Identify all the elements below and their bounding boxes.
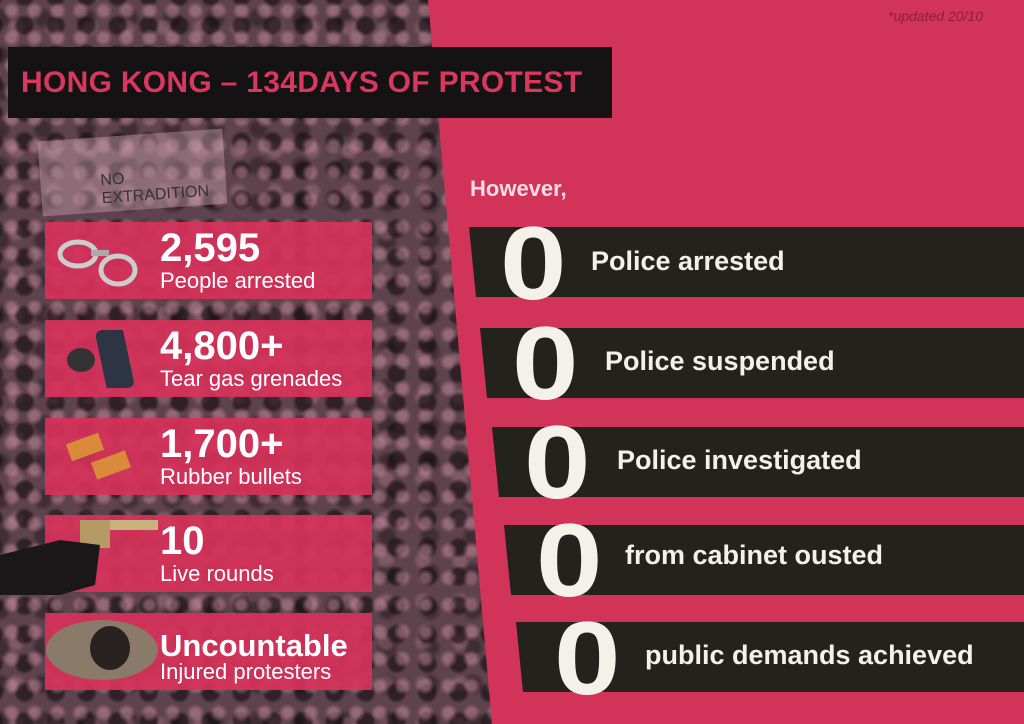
banner <box>38 129 227 216</box>
text: public demands achieved <box>645 640 974 670</box>
text: Police investigated <box>617 445 862 475</box>
text: 0 <box>554 601 621 717</box>
text: Police suspended <box>605 346 835 376</box>
card: live rounds: 10 <box>160 519 204 563</box>
icon: gun in gloved hand <box>0 520 158 595</box>
text: 0 <box>500 206 567 322</box>
card: arrested <box>45 222 372 299</box>
stat: police arrested <box>500 206 785 322</box>
card: tear gas <box>45 320 372 397</box>
card: live rounds <box>45 515 372 592</box>
background: pink panel <box>428 0 1024 724</box>
stat: cabinet ousted <box>536 503 883 619</box>
heading: However: However, <box>470 176 567 201</box>
title <box>8 47 612 118</box>
text: 0 <box>524 405 591 521</box>
title: HONG KONG – 134DAYS OF PROTEST <box>21 66 582 99</box>
card: rubber bullets: Rubber bullets <box>160 464 302 489</box>
updated note: *updated 20/10 <box>888 8 983 24</box>
text: Police arrested <box>591 246 785 276</box>
card: tear gas: Tear gas grenades <box>160 366 342 391</box>
card: arrested: 2,595 <box>160 226 260 270</box>
icon: injured protester <box>46 620 158 680</box>
card: rubber bullets: 1,700+ <box>160 422 283 466</box>
card: rubber bullets <box>45 418 372 495</box>
banner: NO EXTRADITION <box>100 171 210 207</box>
card: injured: Injured protesters <box>160 659 331 684</box>
bar 3 <box>492 427 1024 497</box>
stat: police suspended <box>512 306 835 422</box>
bar 2 <box>480 328 1024 398</box>
text: 0 <box>512 306 579 422</box>
card: injured: Uncountable <box>160 628 348 663</box>
icon: rubber bullets <box>66 432 131 480</box>
card: live rounds: Live rounds <box>160 561 274 586</box>
bar 5 <box>516 622 1024 692</box>
card: arrested: People arrested <box>160 268 315 293</box>
bar 4 <box>504 525 1024 595</box>
card: injured <box>45 613 372 690</box>
text: 0 <box>536 503 603 619</box>
stat: demands <box>554 601 974 717</box>
text: from cabinet ousted <box>625 540 883 570</box>
bar 1 <box>469 227 1024 297</box>
card: tear gas: 4,800+ <box>160 324 283 368</box>
icon: handcuffs <box>58 240 138 286</box>
icon: tear gas canister <box>67 330 134 388</box>
stat: police investigated <box>524 405 862 521</box>
